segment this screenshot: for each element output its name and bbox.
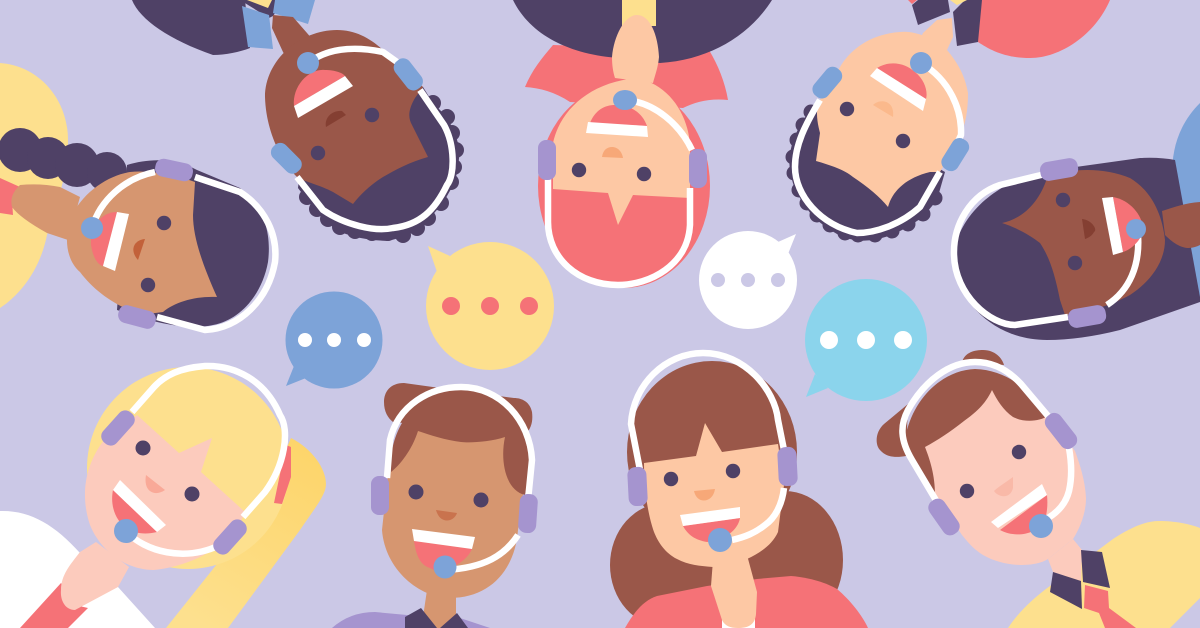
speech bubble: cyan: [805, 279, 927, 401]
nose: [146, 475, 165, 493]
neck: [1048, 539, 1082, 581]
hair buns: [384, 383, 532, 435]
body: [0, 63, 68, 308]
collar: [242, 6, 273, 49]
hair: [906, 369, 1048, 495]
eyes: [365, 108, 379, 122]
collar: [525, 45, 728, 108]
microphone: [708, 528, 732, 552]
sleeve: [20, 583, 88, 628]
person: bottom centre left, tan skin: [332, 383, 538, 628]
person: right, dark brown skin: [953, 103, 1200, 340]
face: [925, 385, 1086, 565]
ear pads: [390, 55, 426, 94]
white shirt: [722, 612, 755, 628]
neck: [11, 184, 80, 240]
face: [644, 423, 784, 567]
ear pads: [627, 467, 648, 506]
neck: [915, 18, 953, 60]
ear pads: [538, 140, 556, 180]
speech bubble: blue: [286, 292, 382, 388]
collar: [1081, 550, 1110, 588]
microphone: [910, 52, 932, 74]
hair: [87, 367, 289, 569]
nose: [694, 489, 715, 501]
headset: [387, 387, 532, 570]
headset: [548, 100, 692, 285]
speech bubble: yellow: [426, 242, 554, 370]
mouth: [590, 105, 647, 126]
eyes: [408, 484, 424, 500]
ear pads: [1042, 410, 1080, 452]
microphone: [114, 519, 138, 543]
neck: [612, 15, 659, 83]
neck: [423, 590, 456, 628]
tie: [1084, 585, 1136, 628]
mouth: [1000, 495, 1047, 534]
face: [553, 78, 690, 225]
hair: [538, 84, 710, 288]
headset: [92, 172, 275, 330]
ear pads: [809, 63, 845, 102]
braid: [0, 128, 127, 192]
mouth: [1113, 197, 1143, 252]
body: [625, 576, 868, 628]
hair with curls: [298, 87, 464, 243]
nose: [326, 111, 346, 127]
microphone: [1126, 219, 1146, 239]
arm: [61, 542, 129, 610]
person: top right, peach skin: [786, 0, 1110, 242]
person: bottom left, blonde: [0, 366, 326, 628]
eyes: [1012, 445, 1026, 459]
body: [0, 511, 155, 628]
headset: [954, 174, 1138, 325]
body: [1172, 103, 1200, 297]
person: top centre, coral hair: [513, 0, 772, 288]
person: top left, dark brown skin: [132, 0, 464, 243]
headset: [795, 63, 961, 233]
eyes: [572, 163, 586, 177]
hair stripe: [274, 445, 291, 504]
eyes: [664, 472, 678, 486]
headset: [631, 353, 784, 540]
speech bubble: white: [699, 231, 797, 329]
microphone: [613, 90, 637, 110]
ponytail: [166, 438, 326, 628]
eyes: [136, 440, 150, 456]
nose: [436, 510, 457, 520]
person: left, tan skin with braid: [0, 63, 275, 331]
neck: [272, 15, 330, 80]
hair: [627, 361, 797, 543]
face: [265, 30, 428, 204]
hair with curls: [786, 100, 945, 242]
hair: [117, 160, 269, 327]
hair: [391, 388, 530, 495]
mouth: [112, 490, 157, 534]
face: [382, 425, 525, 598]
hair buns: [610, 503, 720, 627]
person: bottom centre right, brown hair: [610, 353, 868, 628]
microphone: [297, 52, 319, 74]
microphone: [434, 556, 456, 578]
body: [513, 0, 772, 63]
face: [85, 415, 245, 570]
eyes: [157, 216, 171, 230]
nose: [133, 239, 145, 260]
body: [132, 0, 250, 55]
mouth: [294, 70, 345, 106]
face: [1002, 170, 1165, 315]
headset: [297, 49, 453, 229]
eyes: [1056, 193, 1070, 207]
ear pads: [154, 157, 194, 183]
face: [816, 32, 968, 207]
face: [67, 172, 217, 315]
hair: [953, 158, 1200, 340]
nose: [873, 101, 893, 117]
mouth: [414, 541, 472, 570]
body: [978, 0, 1110, 58]
mouth: [683, 518, 740, 542]
collar: [405, 608, 468, 628]
neck and hand: [711, 555, 757, 628]
microphone: [1029, 514, 1053, 538]
headset: [126, 366, 285, 554]
body: [1008, 521, 1200, 628]
hair buns: [962, 350, 1004, 365]
headset: [902, 362, 1071, 518]
neck: [1162, 202, 1200, 248]
mouth: [91, 212, 117, 266]
ear pads: [371, 476, 389, 515]
body: [332, 612, 490, 628]
ear pads: [1039, 157, 1079, 182]
eyes: [840, 102, 854, 116]
mouth: [877, 63, 927, 99]
nose: [602, 147, 623, 158]
microphone: [81, 217, 103, 239]
person: bottom right, brown hair: [877, 350, 1200, 628]
nose: [1082, 219, 1095, 239]
collar: [912, 0, 950, 25]
ear pads: [98, 407, 138, 449]
nose: [994, 477, 1013, 496]
